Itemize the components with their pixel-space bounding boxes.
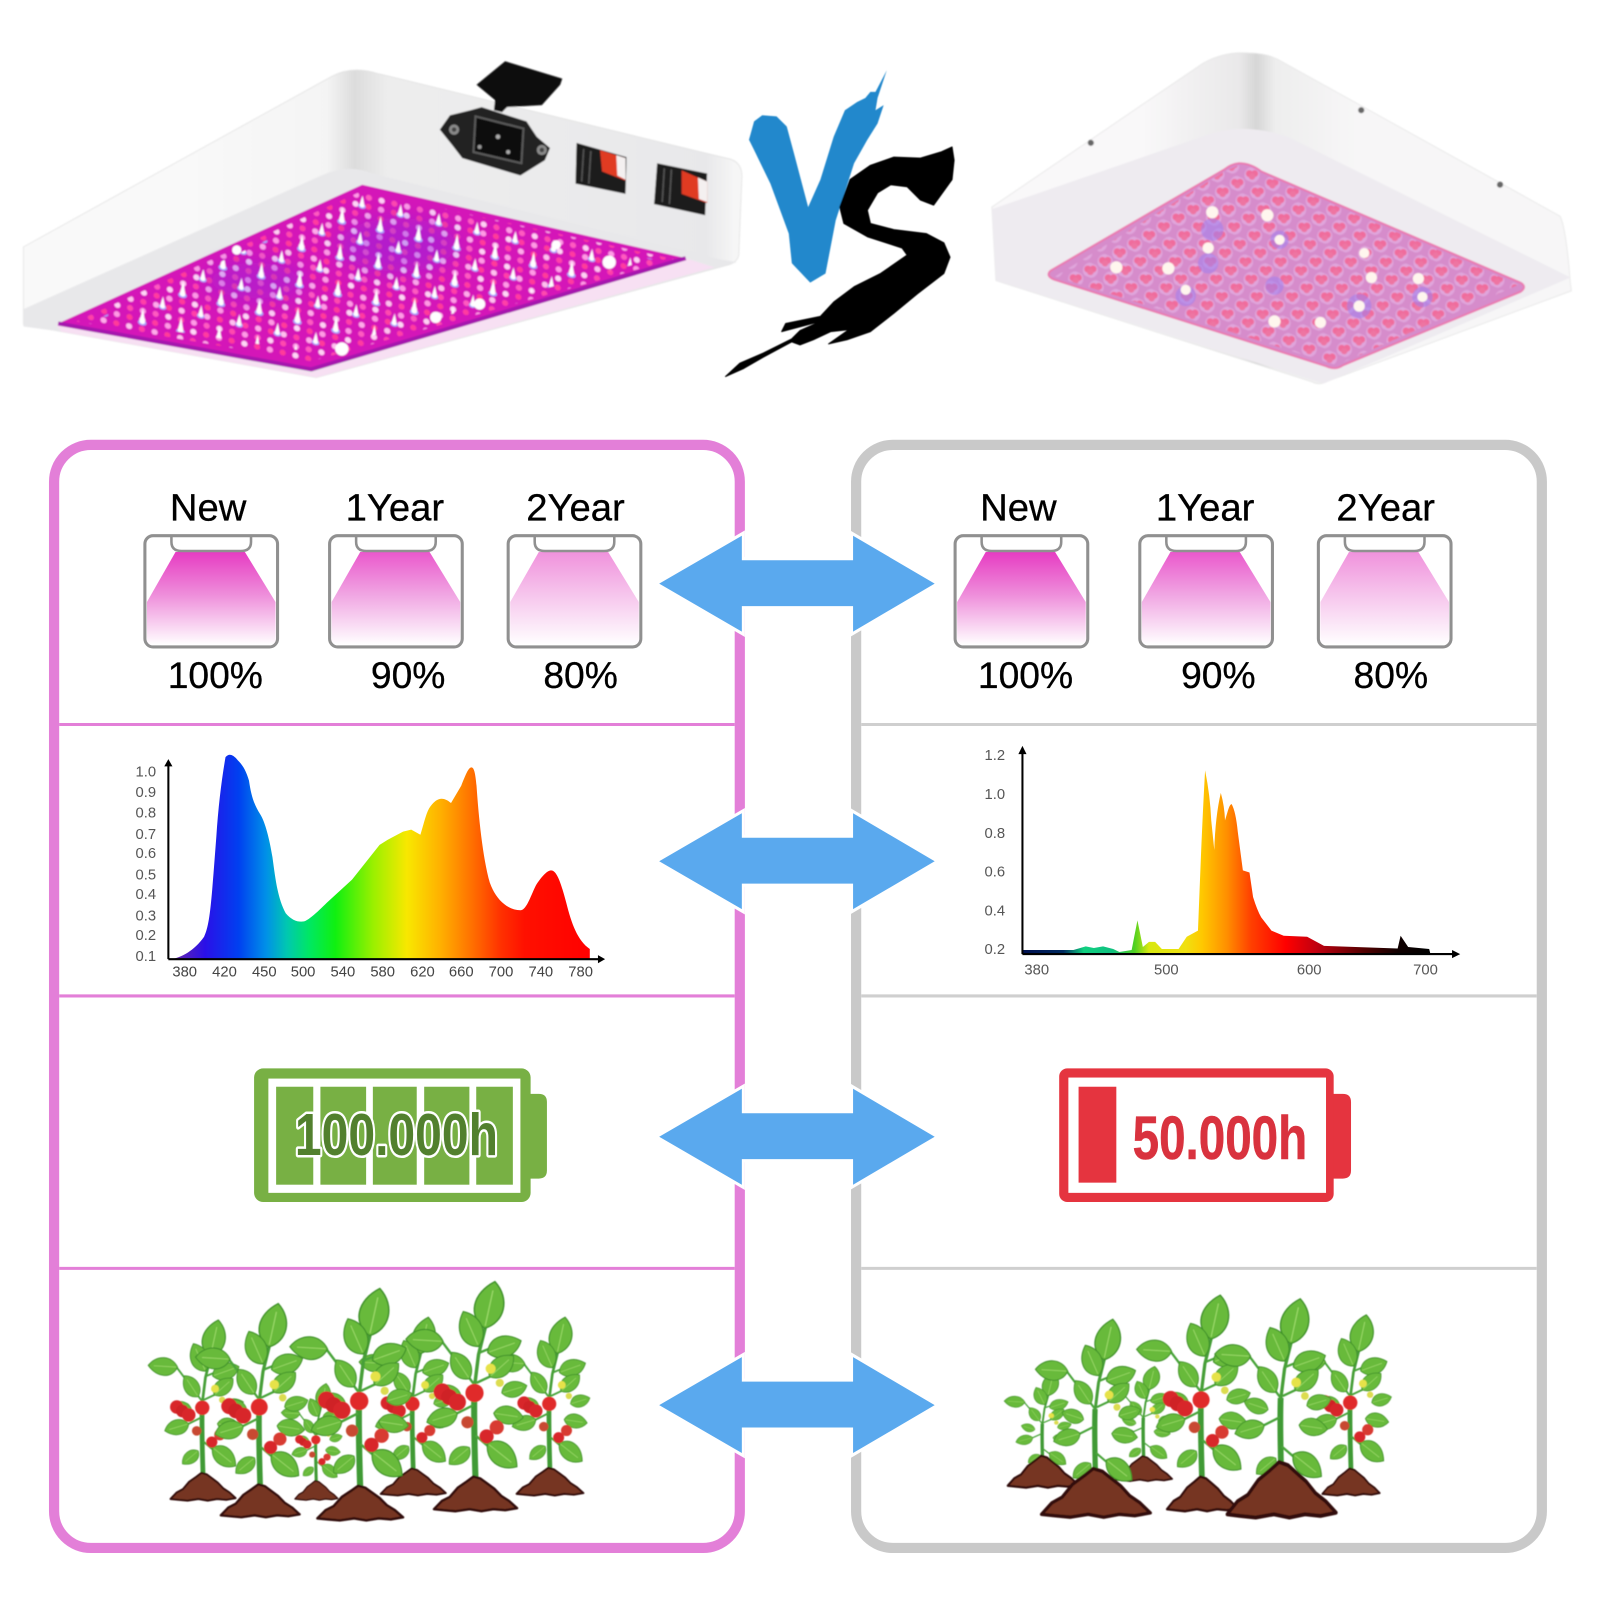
lamp decay tile: new 100%: 100% [168,654,263,696]
chart: full spectrum curve: 0.4 [136,887,156,903]
lamp decay tile: 2 year 80% [508,486,641,696]
icon: red battery 50.000h: 50.000h [1133,1104,1307,1172]
lamp decay tile: new 100% right: New [980,486,1057,529]
light decay row: right [955,486,1451,696]
chart: full spectrum curve: 780 [568,965,593,981]
chart: full spectrum curve: 0.8 [136,805,156,821]
lamp decay tile: new 100% [145,486,278,696]
icon: power inlet with cover [440,61,562,176]
arrow: light decay comparison [659,536,935,632]
chart: full spectrum curve: 0.6 [136,846,156,862]
lamp: powerful LED panel with switches [23,61,742,378]
chart: full spectrum curve: 0.5 [136,868,156,884]
lamp decay tile: 1 year 90% [330,486,462,696]
light decay row: left [145,486,641,696]
panel: right product comparison column [856,445,1542,1548]
chart: narrow spectrum curve: 700 [1413,962,1438,978]
lamp decay tile: 1 year 90%: 1Year [346,486,444,529]
chart: narrow spectrum curve: 500 [1154,962,1179,978]
illustration: dense tomato plants [147,1278,592,1520]
chart: full spectrum curve: 420 [212,965,237,981]
chart: full spectrum curve [136,755,605,981]
chart: full spectrum curve: 1.0 [136,765,156,781]
lamp decay tile: 1 year 90% right: 90% [1181,654,1256,696]
chart: full spectrum curve: 450 [252,965,277,981]
chart: full spectrum curve: 540 [331,965,355,981]
arrow: spectrum comparison [659,813,935,909]
chart: full spectrum curve: 660 [449,965,474,981]
chart: full spectrum curve: 380 [172,965,197,981]
chart: narrow spectrum curve: 0.6 [985,865,1005,881]
VS lettering [726,70,954,377]
icon: red battery 50.000h [1059,1068,1351,1202]
icon: rocker switch one [576,143,627,194]
icon: green battery 100.000h: 100.000h [295,1101,498,1168]
lamp: weak LED panel [992,53,1571,384]
lamp decay tile: 1 year 90% right: 1Year [1156,486,1255,529]
lamp decay tile: 2 year 80%: 80% [543,654,618,696]
chart: full spectrum curve: 500 [291,965,315,981]
chart: full spectrum curve: 0.2 [136,928,156,944]
lamp decay tile: 2 year 80% right [1318,486,1451,696]
chart: narrow spectrum curve: 1.0 [985,787,1005,803]
chart: narrow spectrum curve: 0.2 [985,942,1005,958]
panel: left product comparison column [54,445,740,1548]
letter S brush stroke [726,147,954,377]
chart: full spectrum curve: 700 [489,965,513,981]
chart: narrow spectrum curve: 1.2 [985,748,1005,764]
chart: full spectrum curve: 0.1 [136,949,156,965]
chart: narrow spectrum curve: 0.4 [985,903,1005,919]
arrow: plant growth comparison [659,1357,935,1453]
lamp decay tile: 1 year 90%: 90% [371,654,445,696]
chart: narrow spectrum curve: 600 [1297,962,1322,978]
lamp decay tile: 2 year 80% right: 80% [1354,654,1428,696]
lamp decay tile: new 100% right [955,486,1088,696]
lamp decay tile: new 100%: New [170,486,247,529]
lamp decay tile: 2 year 80% right: 2Year [1336,486,1435,529]
chart: narrow spectrum curve [985,746,1460,978]
chart: full spectrum curve: 0.9 [136,785,156,801]
lamp decay tile: new 100% right: 100% [978,654,1073,696]
chart: full spectrum curve: 620 [410,965,435,981]
arrow: lifetime comparison [659,1089,935,1185]
chart: narrow spectrum curve: 380 [1024,962,1049,978]
chart: full spectrum curve: 0.3 [136,908,156,924]
chart: narrow spectrum curve: 0.8 [985,826,1005,842]
letter V brush stroke [749,70,887,283]
lamp decay tile: 2 year 80%: 2Year [526,486,625,529]
icon: green battery 100.000h [254,1068,547,1202]
illustration: sparse tomato plants [1004,1292,1393,1518]
chart: full spectrum curve: 0.7 [136,827,156,843]
lamp decay tile: 1 year 90% right [1140,486,1272,696]
chart: full spectrum curve: 580 [370,965,395,981]
chart: full spectrum curve: 740 [528,965,553,981]
icon: rocker switch two [654,163,707,215]
